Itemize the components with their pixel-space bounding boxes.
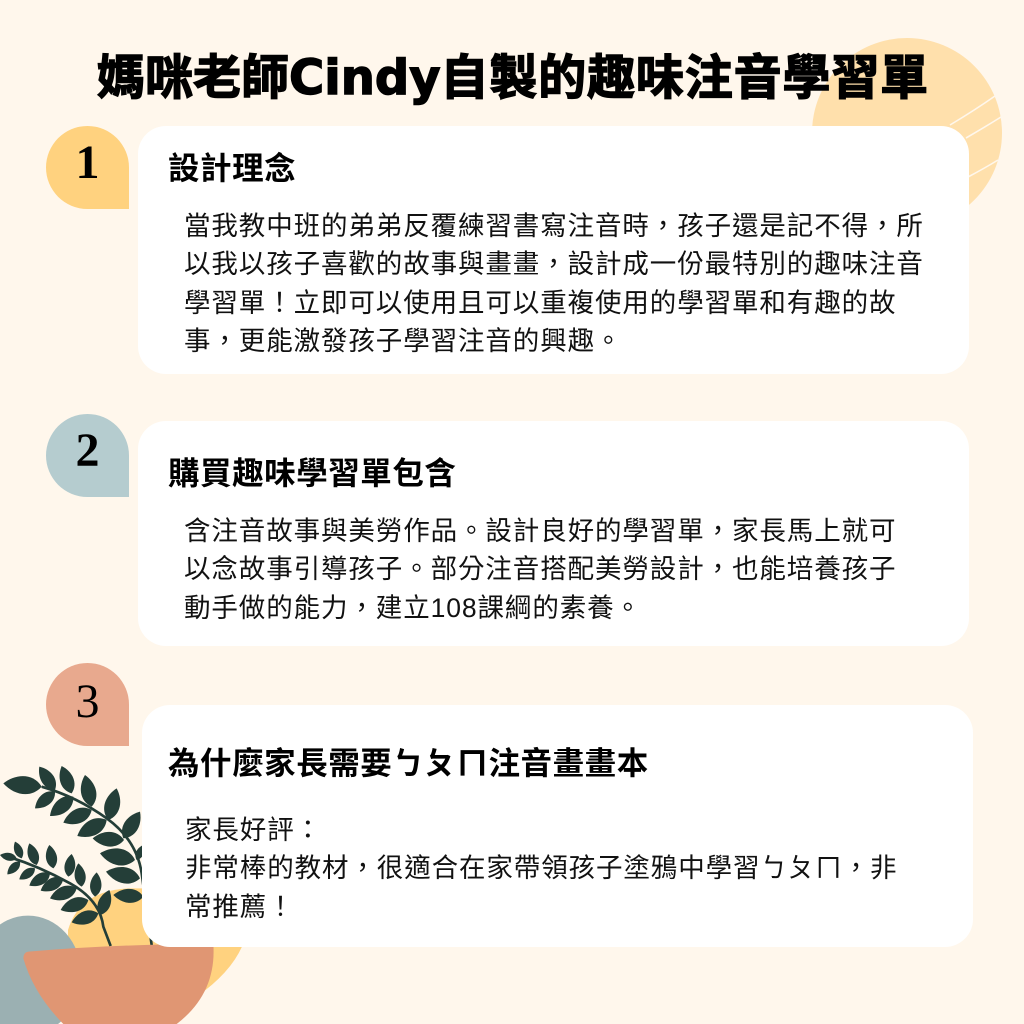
- text: design concept: 學習單！立即可以使用且可以重複使用的學習單和有趣的故: [184, 281, 896, 320]
- badge 1: 1: [76, 136, 100, 189]
- badge 3: 3: [76, 675, 100, 728]
- badge 2: 2: [76, 424, 100, 477]
- text: what is included: [184, 509, 896, 625]
- heading: design concept: 設計理念: [168, 143, 296, 189]
- decoration: top-right sun circle: [812, 38, 1002, 205]
- text: design concept: 當我教中班的弟弟反覆練習書寫注音時，孩子還是記不得，所: [184, 204, 924, 243]
- text: what is included: 含注音故事與美勞作品。設計良好的學習單，家長馬上就可: [184, 509, 896, 548]
- text: parent review: 非常棒的教材，很適合在家帶領孩子塗鴉中學習ㄅㄆㄇ，非: [185, 846, 897, 885]
- text: what is included: 動手做的能力，建立108課綱的素養。: [184, 586, 642, 625]
- panel: why parents need it: [142, 705, 973, 947]
- heading: why parents need it: 為什麼家長需要ㄅㄆㄇ注音畫畫本: [168, 738, 649, 784]
- text: design concept: 事，更能激發孩子學習注音的興趣。: [184, 319, 622, 358]
- text: parent review: 常推薦！: [185, 885, 295, 924]
- text: parent review: [185, 808, 897, 924]
- badge 1: [46, 126, 129, 209]
- text: design concept: [184, 204, 924, 358]
- heading: what is included: 購買趣味學習單包含: [168, 448, 456, 494]
- title: 媽咪老師Cindy自製的趣味注音學習單: [97, 38, 929, 108]
- text: what is included: 以念故事引導孩子。部分注音搭配美勞設計，也能培養孩子: [184, 547, 896, 586]
- badge 3: [46, 663, 129, 746]
- text: design concept: 以我以孩子喜歡的故事與畫畫，設計成一份最特別的趣味注音: [184, 242, 924, 281]
- panel: what is included: [138, 421, 969, 646]
- text: parent review: 家長好評：: [185, 808, 322, 847]
- panel: design concept: [138, 126, 969, 374]
- decoration: bottom-left plant and bowl: [0, 766, 242, 1024]
- badge 2: [46, 414, 129, 497]
